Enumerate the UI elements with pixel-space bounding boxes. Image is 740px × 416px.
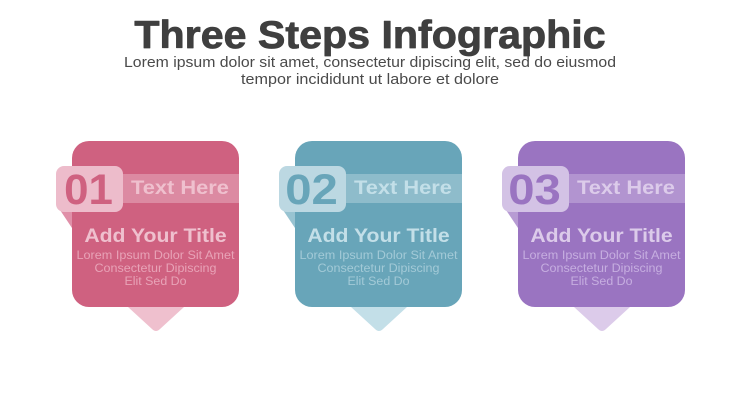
body 3: Lorem Ipsum Dolor Sit Amet [522,250,681,262]
number 01: 01 [64,166,113,214]
body 1: Elit Sed Do [124,276,186,288]
number 02: 02 [285,165,338,214]
subtitle [124,55,616,88]
badge 1 [56,166,123,212]
pointer 2 [351,307,407,331]
ribbon 1 [100,174,239,203]
label 2: Text Here [354,177,452,199]
body 1 [76,250,235,288]
card 2 [295,141,462,307]
heading 3: Add Your Title [530,226,673,247]
body 3 [522,250,681,288]
body 2: Elit Sed Do [348,276,410,288]
fold 2 [279,204,295,228]
body 2 [300,250,458,288]
panel: step 2 [279,141,462,331]
subtitle: tempor incididunt ut labore et dolore [241,72,499,88]
badge 3 [502,166,569,212]
card 3 [518,141,685,307]
body 2: Lorem Ipsum Dolor Sit Amet [300,250,458,262]
badge 2 [279,166,346,212]
ribbon 3 [546,174,685,203]
panel: step 3 [502,141,685,331]
heading 1: Add Your Title [84,226,227,247]
fold 1 [56,204,72,228]
body 2: Consectetur Dipiscing [318,263,440,275]
card 1 [72,141,239,307]
body 3: Consectetur Dipiscing [540,263,662,275]
number 03: 03 [508,165,561,214]
heading 2: Add Your Title [307,226,450,247]
body 3: Elit Sed Do [570,276,632,288]
body 1: Lorem Ipsum Dolor Sit Amet [76,250,235,262]
label 1: Text Here [131,177,229,199]
label 3: Text Here [577,177,675,199]
pointer 3 [574,307,630,331]
subtitle: Lorem ipsum dolor sit amet, consectetur dipiscing elit, sed do eiusmod [124,55,616,71]
title: Three Steps Infographic [134,14,606,57]
pointer 1 [128,307,184,331]
panel: step 1 [56,141,239,331]
ribbon 2 [323,174,462,203]
fold 3 [502,204,518,228]
body 1: Consectetur Dipiscing [94,263,216,275]
